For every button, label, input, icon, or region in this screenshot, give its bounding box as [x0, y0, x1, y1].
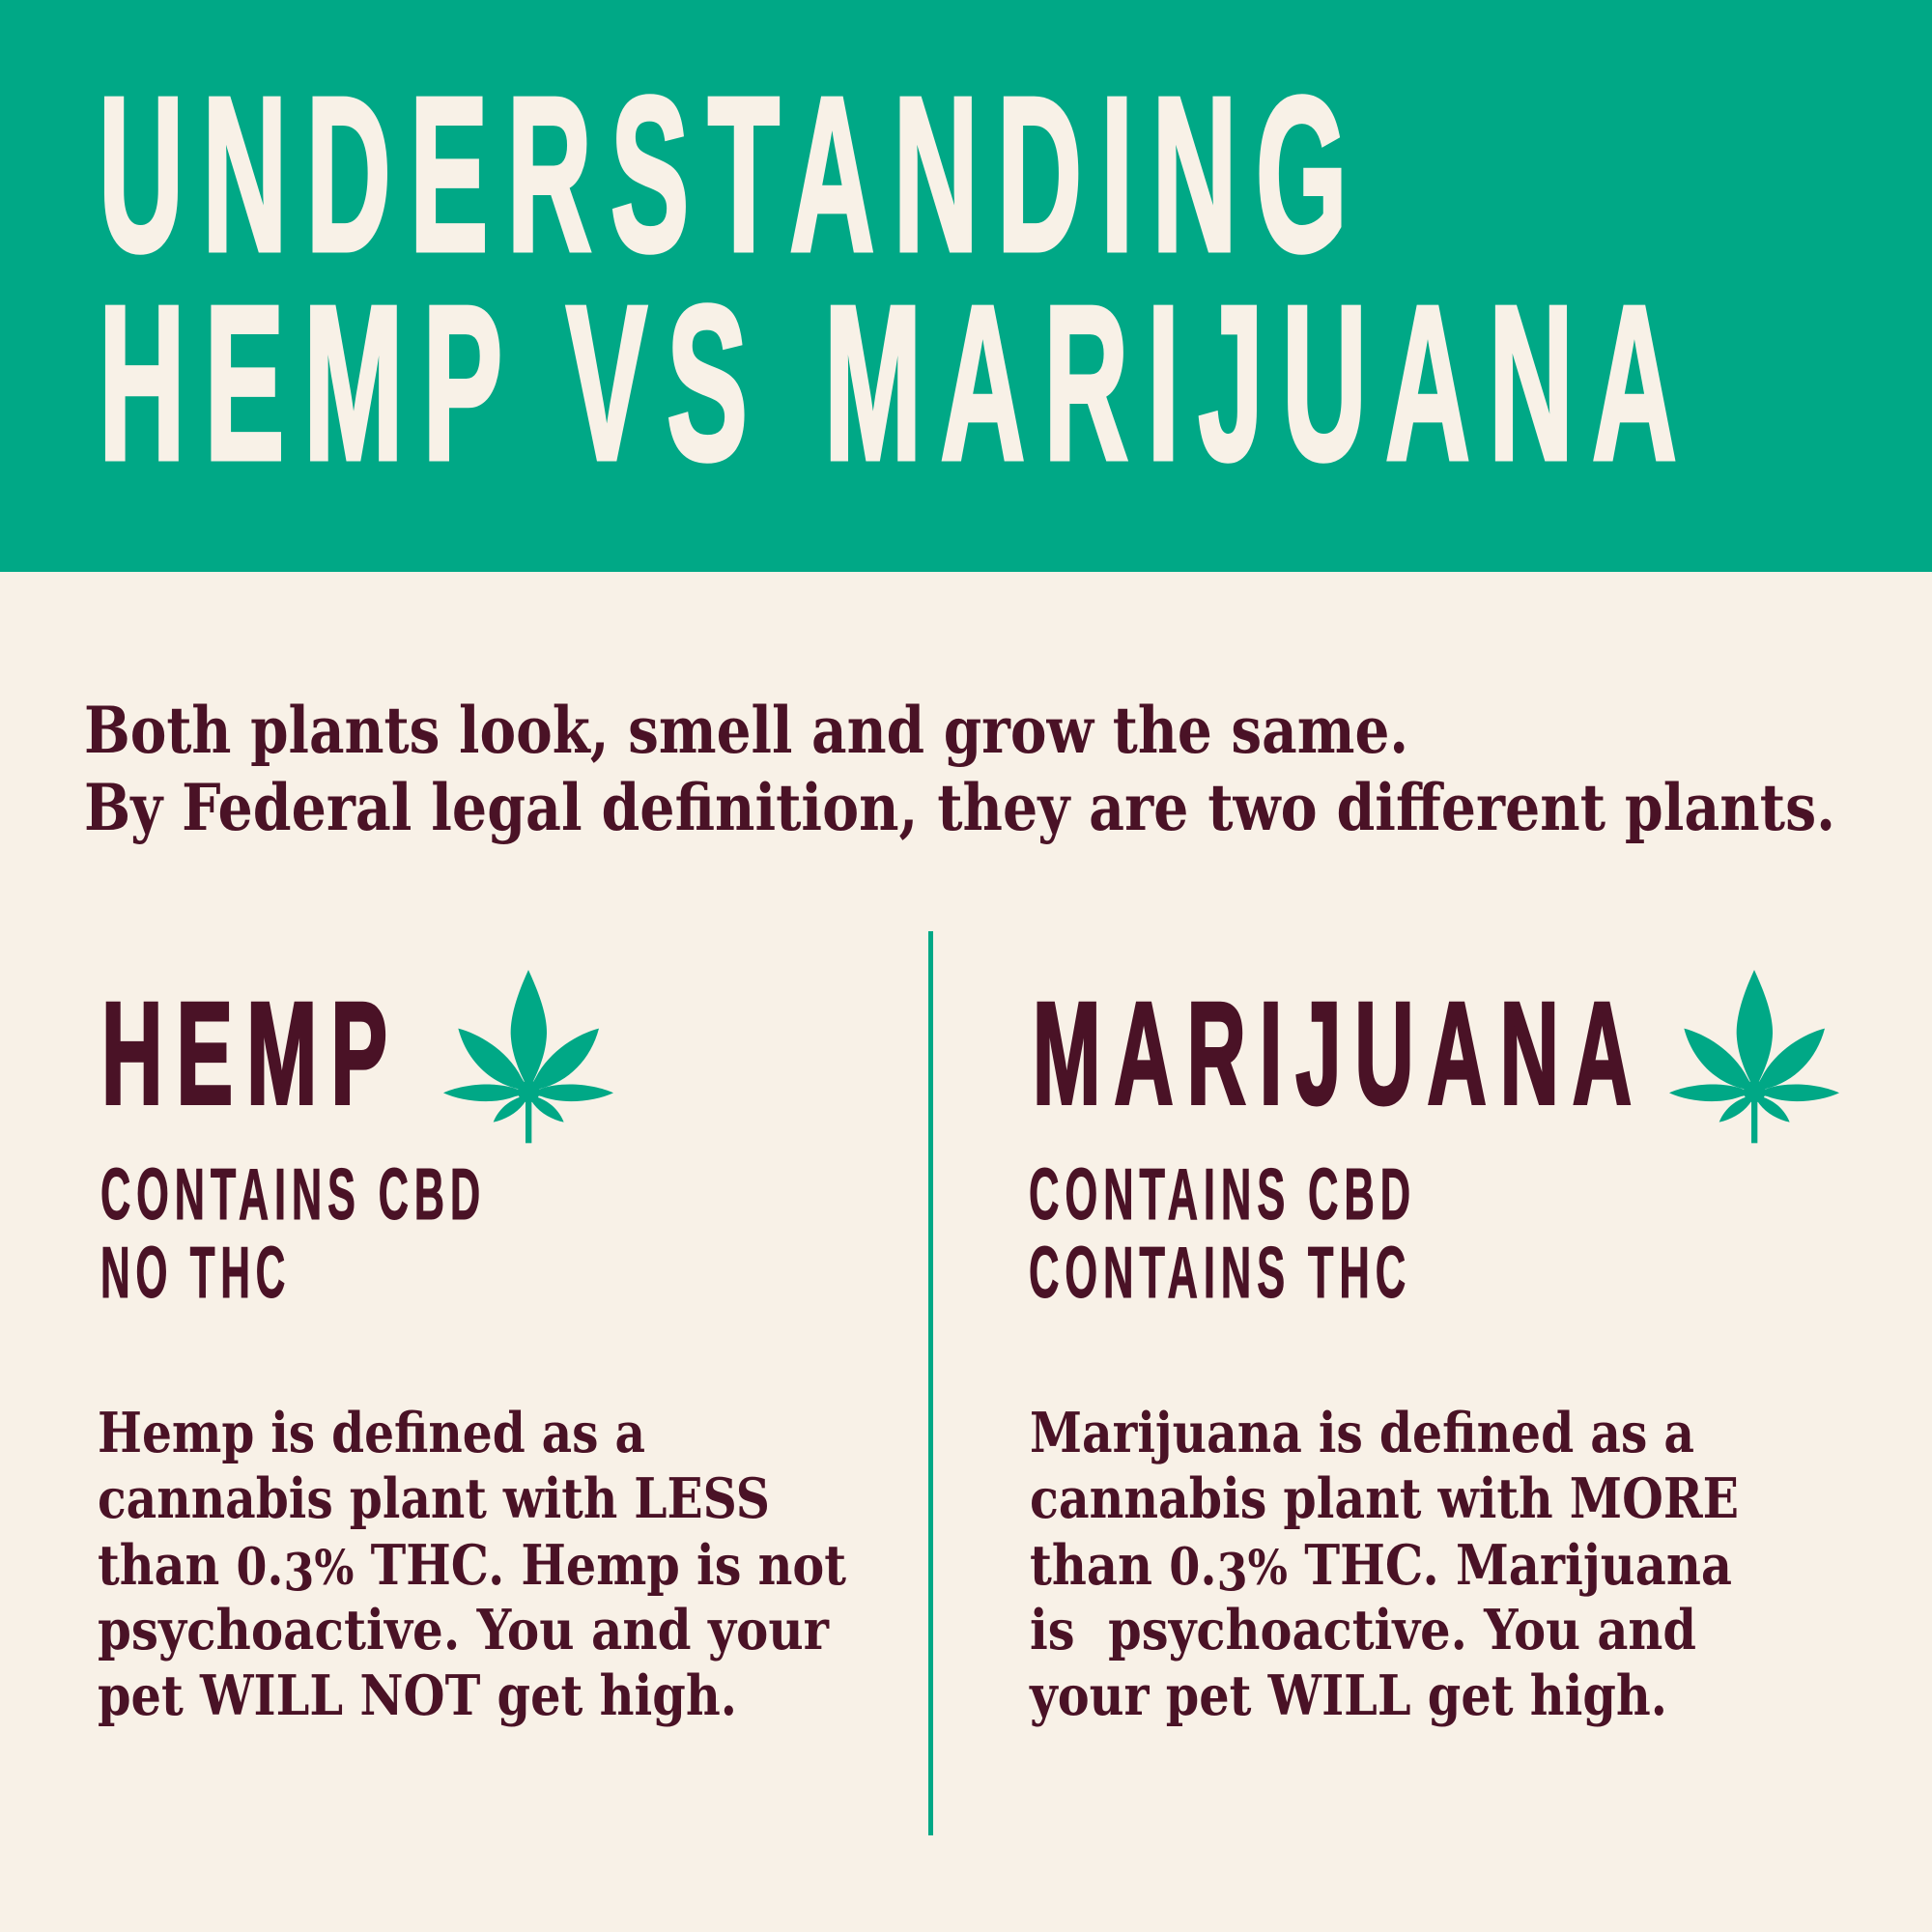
- intro text: Both plants look, smell and grow the same.: [84, 693, 1408, 768]
- hemp properties: [100, 1153, 486, 1313]
- hemp description: [98, 1401, 847, 1728]
- intro text: [84, 693, 1835, 845]
- hemp description: %: [314, 1539, 354, 1596]
- marijuana description: cannabis plant with MORE: [1030, 1466, 1739, 1531]
- title: VS: [566, 261, 767, 506]
- hemp description: psychoactive. You and your: [98, 1598, 830, 1662]
- panel: marijuana: [1029, 970, 1839, 1728]
- marijuana description: THC. Marijuana: [1307, 1533, 1799, 1598]
- hemp description: Hemp is defined as a: [98, 1401, 645, 1465]
- marijuana description: your pet WILL get high.: [1029, 1663, 1667, 1728]
- hemp description: cannabis plant with LESS: [98, 1466, 770, 1531]
- marijuana description: Marijuana is defined as a: [1030, 1401, 1694, 1465]
- icon: marijuana leaf: [1669, 970, 1839, 1143]
- marijuana description: 3: [1217, 1543, 1248, 1603]
- icon: hemp leaf: [443, 970, 613, 1143]
- panel: hemp: [98, 970, 847, 1728]
- marijuana description: is psychoactive. You and: [1030, 1598, 1696, 1662]
- hemp description: THC. Hemp is not: [373, 1533, 923, 1598]
- marijuana properties: CONTAINS CBD: [1029, 1153, 1416, 1235]
- title: [99, 52, 1695, 506]
- header band with title: [0, 0, 1932, 572]
- hemp description: pet WILL NOT get high.: [98, 1663, 737, 1728]
- hemp description: 3: [283, 1543, 314, 1603]
- marijuana description: %: [1248, 1539, 1288, 1596]
- hemp properties: NO THC: [100, 1232, 291, 1313]
- title: HEMP: [99, 261, 522, 506]
- marijuana properties: CONTAINS THC: [1029, 1232, 1411, 1313]
- marijuana description: than 0.: [1030, 1533, 1219, 1598]
- marijuana properties: [1029, 1153, 1416, 1313]
- hemp description: than 0.: [98, 1533, 286, 1598]
- center divider: [928, 931, 933, 1835]
- hemp heading: HEMP: [101, 972, 401, 1134]
- marijuana description: [1029, 1401, 1739, 1728]
- hemp properties: CONTAINS CBD: [100, 1153, 486, 1235]
